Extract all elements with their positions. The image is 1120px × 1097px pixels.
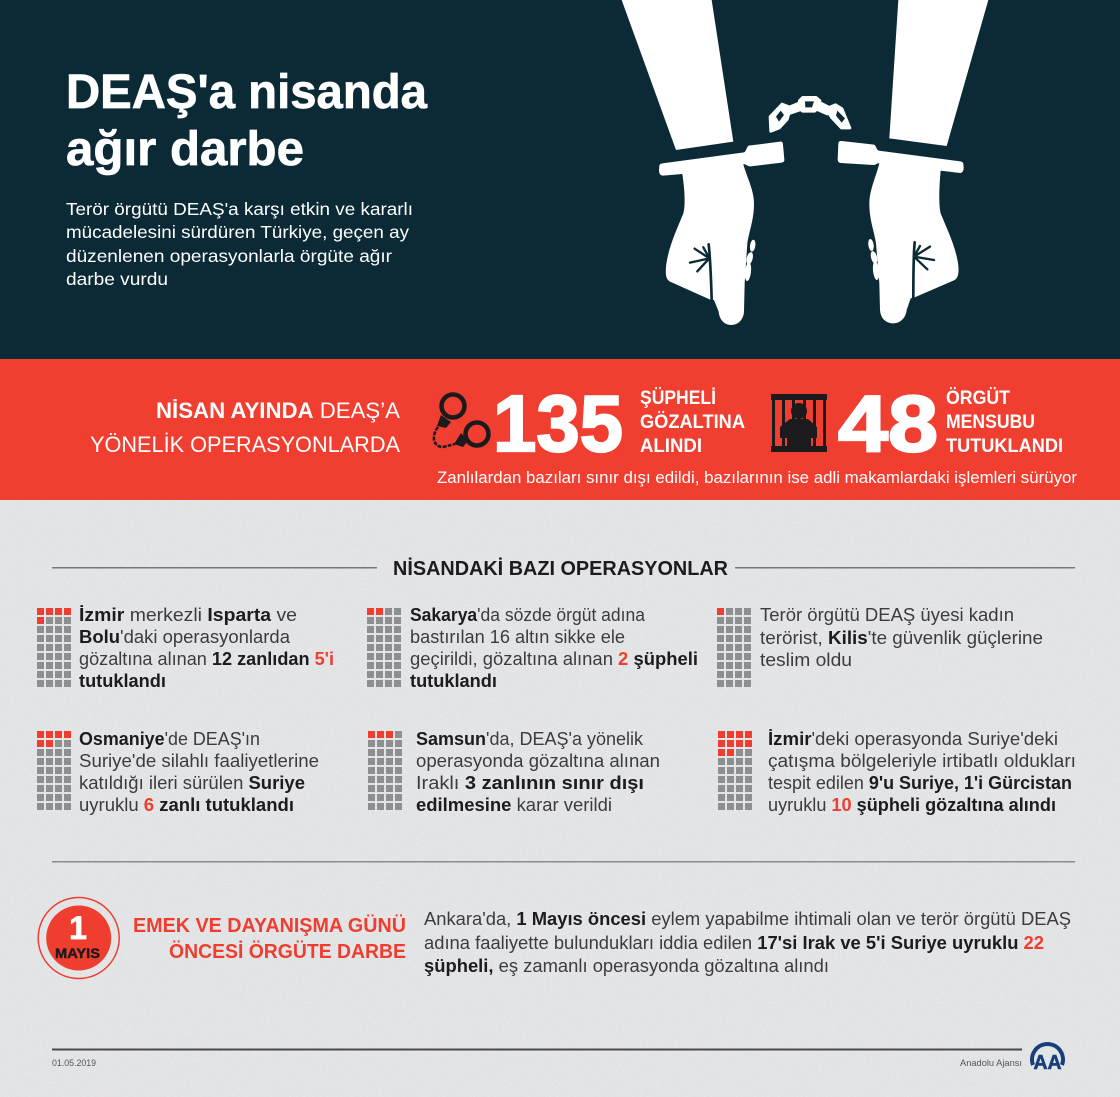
icon: 2 of 36 (367, 608, 401, 687)
operation: Sakarya: Sakarya'da sözde örgüt adına (410, 605, 646, 625)
operation: Sakarya: tutuklandı (410, 671, 497, 691)
label: arrested (946, 388, 1063, 457)
icon: handcuffs (434, 394, 488, 447)
operation: Kilis: terörist, Kilis'te güvenlik güçlerine (760, 628, 1043, 648)
operation: İzmir, Syria: uyruklu 10 şüpheli gözaltına alındı (768, 795, 1056, 815)
operation: İzmir, Isparta, Bolu: İzmir merkezli Isparta ve (79, 605, 297, 625)
callout text: şüpheli, eş zamanlı operasyonda gözaltına alındı (424, 956, 829, 976)
badge: 1 Mayıs (38, 898, 119, 978)
illustration: handcuffed hands with broken chain (622, 0, 988, 325)
icon: broken chain (770, 97, 850, 131)
operation: Sakarya: geçirildi, gözaltına alınan 2 şüpheli (410, 649, 698, 669)
operation: Osmaniye: katıldığı ileri sürülen Suriye (79, 773, 305, 793)
operation: Samsun (368, 729, 660, 815)
callout heading: ÖNCESİ ÖRGÜTE DARBE (169, 940, 406, 963)
icon: prisoner behind bars (771, 394, 827, 452)
intro text: darbe vurdu (66, 269, 168, 289)
intro text: düzenlenen operasyonlarla örgüte ağır (66, 246, 392, 266)
callout heading: EMEK VE DAYANIŞMA GÜNÜ (133, 914, 406, 937)
callout text: adına faaliyette bulundukları iddia edilen 17'si Irak ve 5'i Suriye uyruklu 22 (424, 933, 1044, 953)
icon: 6 of 36 (37, 731, 71, 810)
panel: header (0, 0, 1120, 359)
operation: Osmaniye: Osmaniye'de DEAŞ'ın (79, 729, 260, 749)
operation: İzmir, Isparta, Bolu: Bolu'daki operasyonlarda (79, 627, 291, 647)
footer (52, 1044, 1063, 1074)
icon: 1 of 36 (717, 608, 751, 687)
badge: 1 Mayıs: 1 (69, 910, 87, 946)
logo: Anadolu Ajansı: AA (1034, 1052, 1062, 1074)
band note: Zanlılardan bazıları sınır dışı edildi, bazılarının ise adli makamlardaki işlemleri sürüyor (437, 469, 1078, 487)
operation: Kilis: teslim oldu (760, 650, 852, 670)
operation: İzmir, Isparta, Bolu: gözaltına alınan 12 zanlıdan 5'i (79, 649, 334, 669)
label: arrested: MENSUBU (946, 412, 1035, 433)
number: 135: 135 (493, 379, 623, 468)
callout text: Ankara'da, 1 Mayıs öncesi eylem yapabilme ihtimali olan ve terör örgütü DEAŞ (424, 909, 1071, 929)
logo: Anadolu Ajansı (1032, 1044, 1063, 1074)
section heading: NİSANDAKİ BAZI OPERASYONLAR (393, 557, 729, 580)
intro text (66, 199, 413, 289)
icon: 5 of 36 (37, 608, 71, 687)
operation: Sakarya (367, 605, 698, 691)
callout heading (133, 914, 406, 963)
callout text (424, 909, 1071, 976)
operation: Samsun: Iraklı 3 zanlının sınır dışı (416, 773, 644, 793)
operation: Kilis: Terör örgütü DEAŞ üyesi kadın (760, 605, 1014, 625)
operation: İzmir, Isparta, Bolu (37, 605, 334, 691)
operation: İzmir, Syria (718, 729, 1076, 815)
operation: İzmir, Syria: İzmir'deki operasyonda Suriye'deki (768, 729, 1058, 749)
operation: Sakarya: bastırılan 16 altın sikke ele (410, 627, 625, 647)
operation: Samsun: operasyonda gözaltına alınan (416, 751, 660, 771)
band heading: YÖNELİK OPERASYONLARDA (90, 432, 400, 457)
label: detained: GÖZALTINA (640, 412, 745, 433)
operation: Osmaniye (37, 729, 319, 815)
operation: İzmir, Isparta, Bolu: tutuklandı (79, 671, 166, 691)
icon: 10 of 36 (718, 731, 752, 810)
footer: 01.05.2019 (52, 1058, 96, 1068)
intro text: mücadelesini sürdüren Türkiye, geçen ay (66, 222, 409, 242)
operation: İzmir, Syria: tespit edilen 9'u Suriye, 1'i Gürcistan (768, 773, 1072, 793)
operation: Samsun: Samsun'da, DEAŞ'a yönelik (416, 729, 644, 749)
band heading (90, 398, 400, 457)
badge: 1 Mayıs: MAYIS (55, 946, 100, 961)
operation: İzmir, Syria: çatışma bölgeleriyle irtibatlı oldukları (768, 751, 1076, 771)
label: arrested: ÖRGÜT (946, 388, 1010, 409)
operation: Samsun: edilmesine karar verildi (416, 795, 612, 815)
panel: red statistics band (0, 359, 1120, 500)
title: ağır darbe (66, 123, 304, 176)
operation: Kilis (717, 605, 1043, 687)
label: detained: ALINDI (640, 436, 702, 457)
label: arrested: TUTUKLANDI (946, 436, 1063, 457)
title (66, 66, 427, 176)
footer: Anadolu Ajansı (960, 1058, 1022, 1069)
icon: 3 of 36 (368, 731, 402, 810)
number: 48: 48 (838, 379, 938, 468)
operation: Osmaniye: uyruklu 6 zanlı tutuklandı (79, 795, 294, 815)
intro text: Terör örgütü DEAŞ'a karşı etkin ve kararlı (66, 199, 413, 219)
operation: Osmaniye: Suriye'de silahlı faaliyetlerine (79, 751, 319, 771)
title: DEAŞ'a nisanda (66, 66, 427, 119)
label: detained: ŞÜPHELİ (640, 388, 716, 409)
band heading: NİSAN AYINDA DEAŞ’A (156, 398, 400, 423)
label: detained (640, 388, 745, 457)
